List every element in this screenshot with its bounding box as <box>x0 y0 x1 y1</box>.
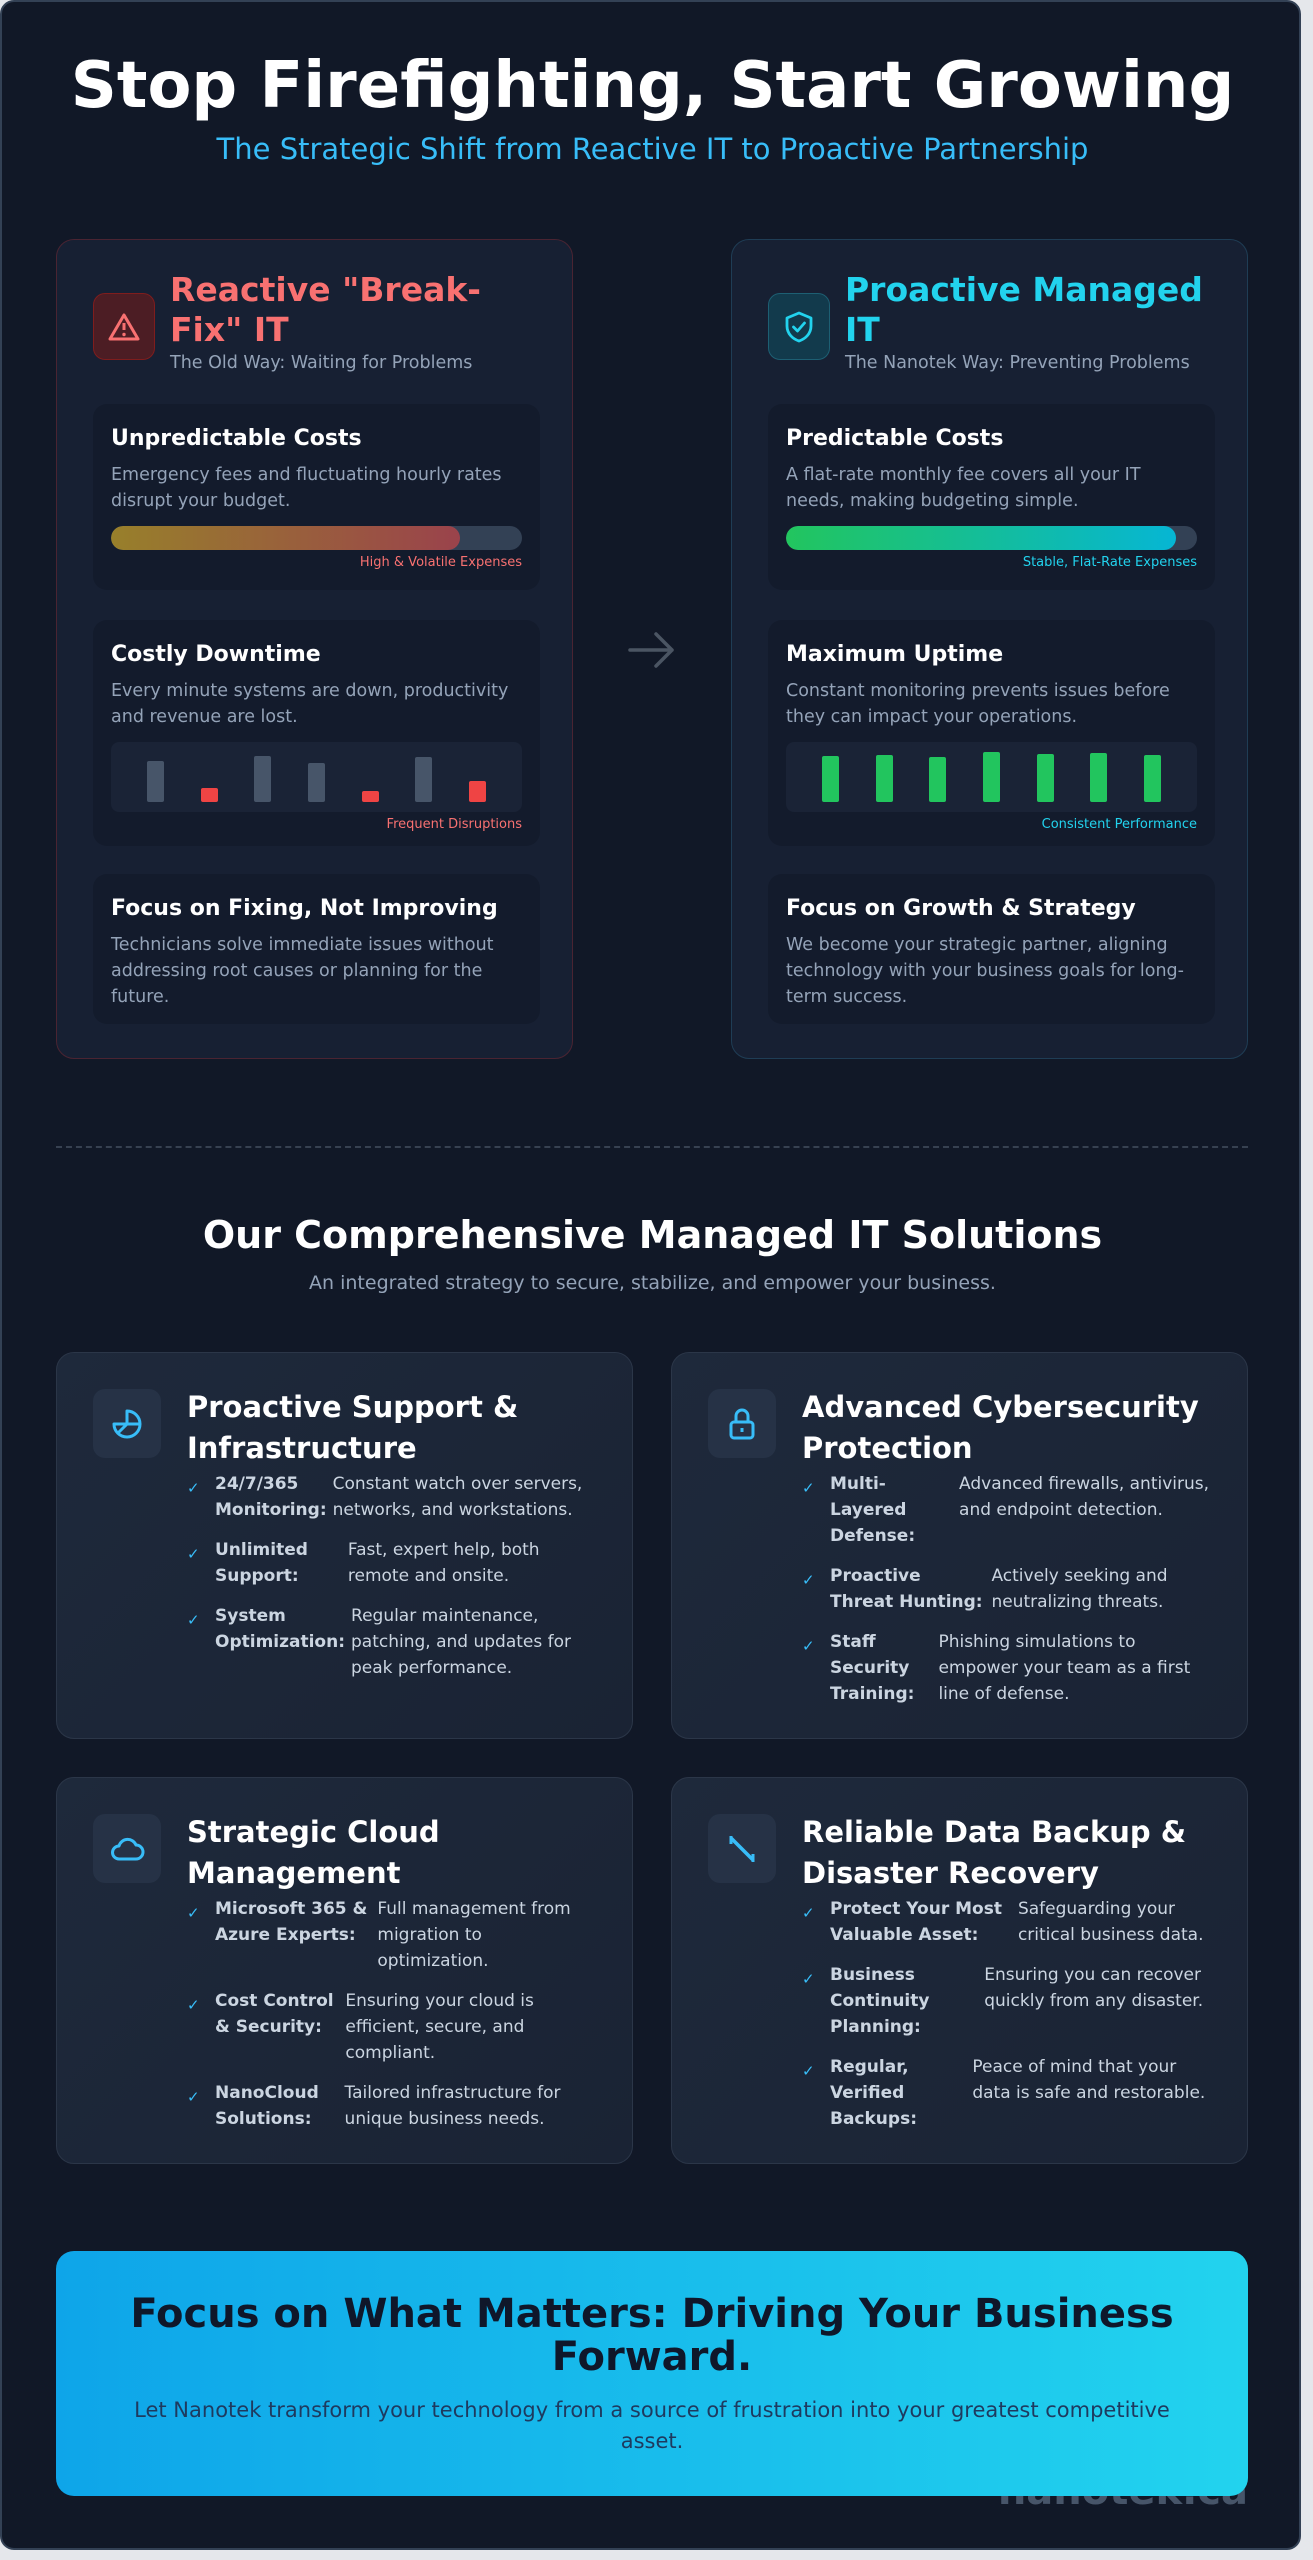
list: Multi-Layered Defense: <box>830 1474 915 1546</box>
card: unpredictable costs: Unpredictable Costs <box>111 426 362 451</box>
list: Unlimited Support: <box>215 1540 308 1586</box>
CTA heading: Focus on What Matters: Driving Your Business Forward. <box>130 2291 1174 2380</box>
chart: performance <box>786 742 1197 812</box>
card: costly downtime: Every minute systems are down, productivity and revenue are lost. <box>111 681 508 727</box>
section subtitle: An integrated strategy to secure, stabilize, and empower your business. <box>309 1272 996 1294</box>
card: predictable costs: Stable, Flat-Rate Expenses <box>1023 555 1197 570</box>
list: ✓ <box>187 1479 200 1497</box>
card: growth: Focus on Growth & Strategy <box>786 896 1136 921</box>
card: costly downtime <box>93 620 540 846</box>
list: Phishing simulations to empower your team as a first line of defense. <box>938 1632 1190 1704</box>
heading: Strategic Cloud Management <box>187 1815 440 1890</box>
text: nanotek way: The Nanotek Way: Preventing Problems <box>845 353 1190 373</box>
list: Ensuring your cloud is efficient, secure, and compliant. <box>345 1991 534 2063</box>
list <box>802 1899 1205 2129</box>
card: cybersecurity <box>671 1352 1248 1739</box>
heading: reactive: Reactive "Break-Fix" IT <box>170 270 481 349</box>
list: Business Continuity Planning: <box>830 1965 929 2037</box>
callout: CTA <box>56 2251 1248 2496</box>
section heading: Our Comprehensive Managed IT Solutions <box>203 1213 1102 1257</box>
icon: lock <box>708 1389 776 1458</box>
icon: pie chart <box>93 1389 161 1458</box>
list: System Optimization: <box>215 1606 345 1652</box>
list: Regular, Verified Backups: <box>830 2057 917 2129</box>
list: Microsoft 365 & Azure Experts: <box>215 1899 367 1945</box>
card: focus on fixing: Technicians solve immediate issues without addressing root causes or planning for the future. <box>111 935 494 1007</box>
subtitle: The Strategic Shift from Reactive IT to Proactive Partnership <box>217 132 1088 166</box>
list <box>802 1474 1209 1704</box>
icon: backup <box>708 1814 776 1883</box>
list: ✓ <box>802 1970 815 1988</box>
list: Fast, expert help, both remote and onsite. <box>348 1540 540 1586</box>
heading: Reliable Data Backup & Disaster Recovery <box>802 1815 1186 1890</box>
list: Peace of mind that your data is safe and restorable. <box>972 2057 1205 2103</box>
list: ✓ <box>802 1904 815 1922</box>
arrow <box>628 632 674 668</box>
list <box>187 1899 571 2129</box>
card: maximum uptime <box>768 620 1215 846</box>
list: ✓ <box>802 1637 815 1655</box>
card: growth: We become your strategic partner, aligning technology with your business goals for long-term success. <box>786 935 1184 1007</box>
list: Constant watch over servers, networks, and workstations. <box>333 1474 582 1520</box>
list: Cost Control & Security: <box>215 1991 334 2037</box>
card: costly downtime: Frequent Disruptions <box>387 817 522 832</box>
icon: cloud <box>93 1814 161 1883</box>
card: proactive support <box>56 1352 633 1739</box>
list: Ensuring you can recover quickly from any disaster. <box>984 1965 1203 2011</box>
card: unpredictable costs: High & Volatile Expenses <box>360 555 522 570</box>
panel: reactive <box>56 239 573 1059</box>
watermark: nanotek.ca <box>998 2468 1248 2514</box>
list: ✓ <box>187 2088 200 2106</box>
card: focus on fixing <box>93 874 540 1024</box>
card: backup <box>671 1777 1248 2164</box>
heading: proactive: Proactive Managed IT <box>845 270 1203 349</box>
list: ✓ <box>187 1996 200 2014</box>
list: Staff Security Training: <box>830 1632 914 1704</box>
card: predictable costs: Predictable Costs <box>786 426 1003 451</box>
card: maximum uptime: Consistent Performance <box>1042 817 1197 832</box>
heading: Proactive Support & Infrastructure <box>187 1390 518 1465</box>
icon: shield <box>768 293 830 360</box>
heading: Advanced Cybersecurity Protection <box>802 1390 1199 1465</box>
card: maximum uptime: Maximum Uptime <box>786 642 1003 667</box>
title: Stop Firefighting, Start Growing <box>71 49 1234 123</box>
card: unpredictable costs <box>93 404 540 590</box>
icon: warning <box>93 293 155 360</box>
card: predictable costs: A flat-rate monthly fee covers all your IT needs, making budgeting simple. <box>786 465 1141 511</box>
chart: disruptions <box>111 742 522 812</box>
list: Regular maintenance, patching, and updates for peak performance. <box>351 1606 571 1678</box>
list: Advanced firewalls, antivirus, and endpoint detection. <box>959 1474 1209 1520</box>
list: ✓ <box>187 1545 200 1563</box>
card: maximum uptime: Constant monitoring prevents issues before they can impact your operations. <box>786 681 1170 727</box>
list: ✓ <box>802 1479 815 1497</box>
CTA text: Let Nanotek transform your technology from a source of frustration into your greatest competitive asset. <box>134 2398 1170 2453</box>
card: costly downtime: Costly Downtime <box>111 642 321 667</box>
list <box>187 1474 582 1678</box>
list: NanoCloud Solutions: <box>215 2083 319 2129</box>
card: cloud <box>56 1777 633 2164</box>
list: Proactive Threat Hunting: <box>830 1566 983 1612</box>
list: Full management from migration to optimization. <box>377 1899 571 1971</box>
list: ✓ <box>187 1904 200 1922</box>
list: Safeguarding your critical business data. <box>1018 1899 1203 1945</box>
card: growth <box>768 874 1215 1024</box>
list: Tailored infrastructure for unique business needs. <box>345 2083 560 2129</box>
list: Protect Your Most Valuable Asset: <box>830 1899 1002 1945</box>
text: old way: The Old Way: Waiting for Problems <box>170 353 472 373</box>
list: 24/7/365 Monitoring: <box>215 1474 327 1520</box>
card: focus on fixing: Focus on Fixing, Not Improving <box>111 896 498 921</box>
list: Actively seeking and neutralizing threats. <box>991 1566 1168 1612</box>
card: predictable costs <box>768 404 1215 590</box>
list: ✓ <box>802 1571 815 1589</box>
card: unpredictable costs: Emergency fees and fluctuating hourly rates disrupt your budget. <box>111 465 502 511</box>
list: ✓ <box>802 2062 815 2080</box>
list: ✓ <box>187 1611 200 1629</box>
panel: proactive <box>731 239 1248 1059</box>
